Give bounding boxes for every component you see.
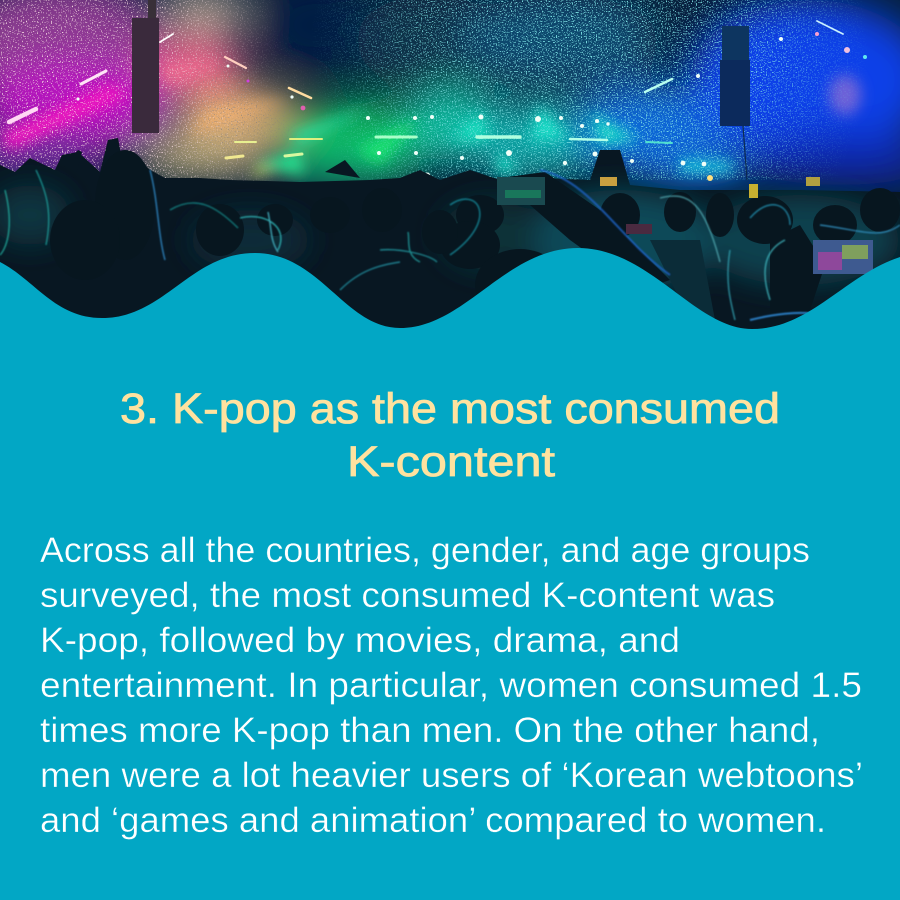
spot lights — [76, 32, 867, 181]
body text: Across all the countries, gender, and age groups — [40, 531, 810, 570]
body text — [40, 531, 863, 840]
stage light haze — [0, 0, 900, 187]
body text: and ‘games and animation’ compared to women. — [40, 801, 826, 840]
body text: men were a lot heavier users of ‘Korean webtoons’ — [40, 756, 863, 795]
body text: K-pop, followed by movies, drama, and — [40, 621, 680, 660]
right speaker tower — [720, 26, 750, 180]
light bars — [9, 21, 843, 158]
audience silhouettes — [0, 138, 900, 340]
soft beams — [0, 62, 861, 178]
confetti — [0, 0, 870, 190]
crowd tint — [0, 185, 900, 290]
body text: entertainment. In particular, women consumed 1.5 — [40, 666, 862, 705]
audience heads — [50, 150, 900, 321]
left speaker tower — [132, 0, 159, 133]
body text: times more K-pop than men. On the other hand, — [40, 711, 820, 750]
heading: K-content — [347, 438, 555, 486]
heading: 3. K-pop as the most consumed — [120, 385, 780, 433]
heading — [120, 385, 780, 486]
wave edge — [0, 248, 900, 340]
phone screens — [497, 177, 873, 274]
audience rim light — [0, 170, 900, 320]
body text: surveyed, the most consumed K-content was — [40, 576, 775, 615]
concert photo — [0, 0, 900, 340]
